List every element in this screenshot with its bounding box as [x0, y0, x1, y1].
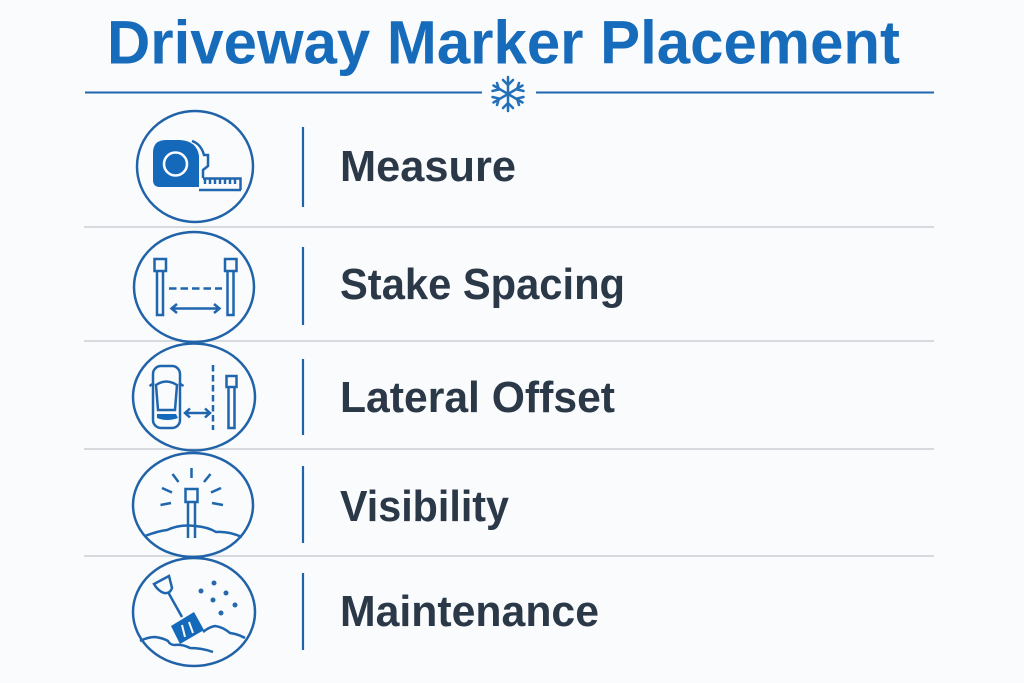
divider [302, 573, 304, 650]
icon: two stakes with arrow [134, 232, 254, 342]
label: Stake Spacing [340, 260, 625, 309]
row: maintenance [133, 558, 599, 666]
row: lateral offset [133, 344, 615, 450]
icon: glowing stake in snow [133, 453, 253, 557]
icon: snowflake [492, 77, 524, 111]
divider [302, 359, 304, 435]
divider [302, 127, 304, 207]
row: stake spacing [134, 232, 625, 342]
row separators [84, 227, 934, 556]
title: Driveway Marker Placement [107, 8, 900, 76]
divider [302, 247, 304, 325]
row: visibility [133, 453, 509, 557]
label: Lateral Offset [340, 373, 615, 422]
divider [302, 466, 304, 543]
label: Maintenance [340, 587, 599, 636]
icon: tape measure [137, 111, 253, 222]
title divider with snowflake [85, 77, 934, 111]
label: Measure [340, 142, 516, 191]
label: Visibility [340, 482, 509, 531]
icon: car, offset arrow and stake [133, 344, 255, 450]
row: measure [137, 111, 516, 222]
icon: snow shovel [133, 558, 255, 666]
